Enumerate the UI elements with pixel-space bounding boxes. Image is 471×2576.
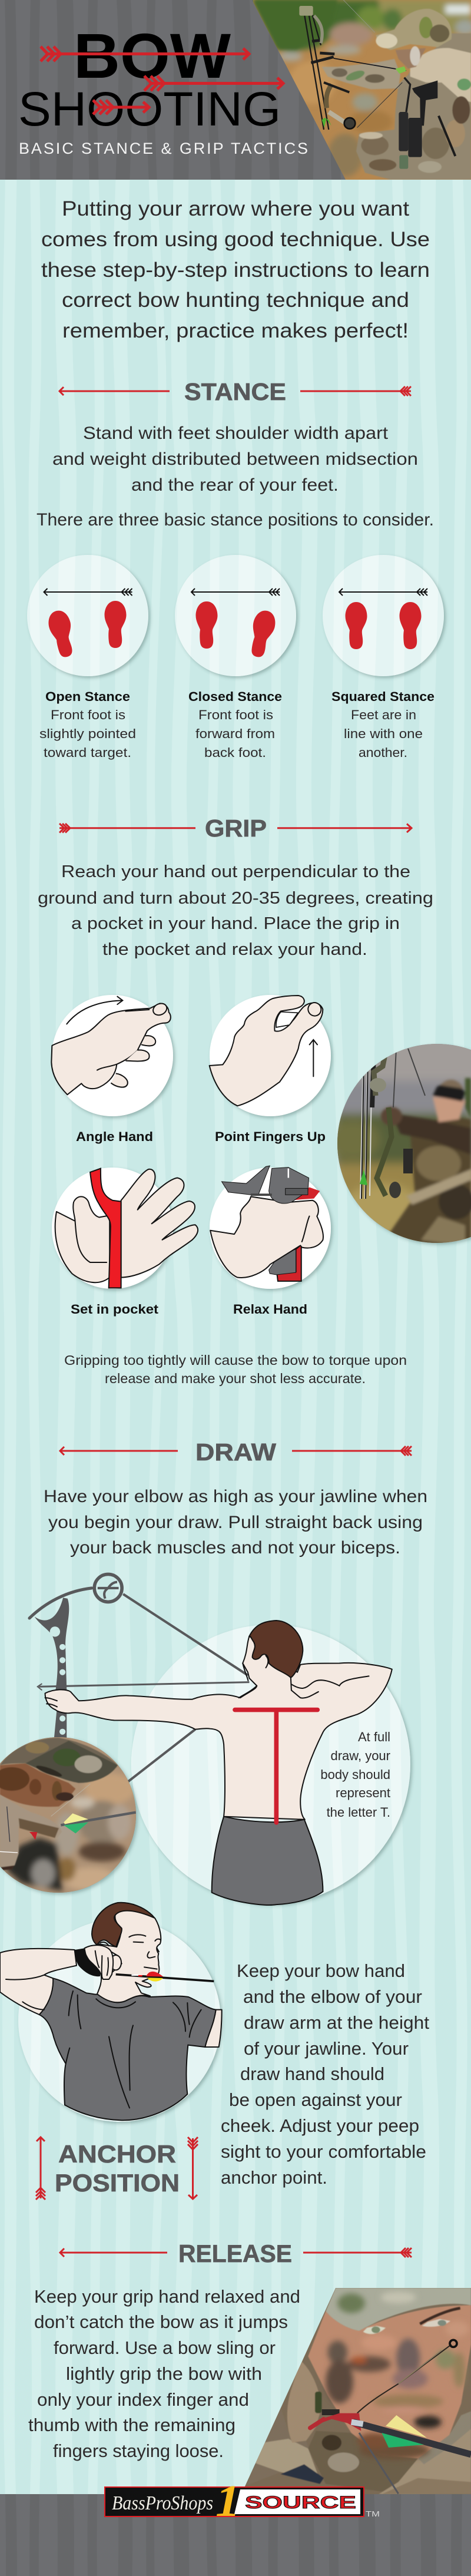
section: stance	[27, 378, 444, 760]
icon: open stance feet	[46, 601, 127, 659]
panel: closed stance: forward from	[195, 726, 275, 741]
subtitle: BASIC STANCE & GRIP TACTICS	[19, 140, 308, 157]
caption: full draw: the letter T.	[327, 1805, 390, 1820]
arrow: top title arrow	[41, 47, 249, 61]
icon: arrow with fletching	[116, 1972, 214, 1982]
panel: squared stance: Feet are in	[351, 707, 416, 722]
panel: anchor circle	[18, 1919, 221, 2122]
anchor description: draw arm at the height	[244, 2012, 429, 2033]
draw description: you begin your draw. Pull straight back using	[48, 1513, 423, 1532]
intro paragraph: these step-by-step instructions to learn	[41, 259, 430, 282]
heading: anchor position	[36, 2137, 198, 2200]
intro paragraph	[41, 197, 430, 342]
anchor description: anchor point.	[221, 2167, 327, 2188]
white source panel	[234, 2489, 360, 2514]
illustration: angle hand	[51, 995, 173, 1144]
heading: draw	[60, 1439, 412, 1466]
photo: close-up of hunter drawing arrow	[0, 1736, 140, 1895]
release description: thumb with the remaining	[28, 2415, 236, 2435]
header banner	[0, 0, 471, 180]
photo: hunter aiming bow in circle	[327, 1043, 471, 1249]
heading: release	[60, 2240, 412, 2267]
caption: full draw	[320, 1730, 390, 1820]
anchor description	[221, 1960, 429, 2188]
panel: squared stance: another.	[359, 745, 407, 760]
release description: only your index finger and	[37, 2389, 249, 2410]
illustration: archer at anchor point	[0, 1903, 222, 2120]
caption: full draw: At full	[358, 1730, 390, 1744]
section: anchor position	[0, 1903, 429, 2200]
stance description: There are three basic stance positions to consider.	[37, 510, 434, 530]
icon: wrist band	[75, 1948, 100, 1976]
draw description: your back muscles and not your biceps.	[70, 1538, 400, 1557]
release description: fingers staying loose.	[53, 2441, 224, 2461]
anchor description: cheek. Adjust your peep	[221, 2115, 419, 2136]
anchor description: Keep your bow hand	[237, 1960, 405, 1981]
photo: hunter face with camo paint	[241, 2286, 471, 2496]
panel: open stance	[27, 555, 148, 760]
panel: open stance: Open Stance	[45, 689, 130, 704]
anchor description: sight to your comfortable	[221, 2141, 426, 2162]
intro paragraph: Putting your arrow where you want	[62, 197, 409, 220]
stance description: and the rear of your feet.	[131, 475, 339, 495]
figure: grey t-shirt	[39, 1978, 216, 2120]
illustration: set in pocket	[52, 1168, 198, 1317]
title: BOW: BOW	[74, 20, 231, 91]
draw description	[44, 1487, 427, 1557]
illustration: archer at full draw forming a T	[29, 1574, 392, 1905]
stance description: Stand with feet shoulder width apart	[83, 424, 389, 443]
logo: Bass Pro Shops 1 Source: BassProShops	[112, 2492, 213, 2514]
figure: head and hair	[92, 1903, 161, 2002]
anchor description: and the elbow of your	[243, 1986, 422, 2007]
release description: lightly grip the bow with	[66, 2363, 262, 2384]
heading: release: RELEASE	[178, 2240, 292, 2267]
illustration: set in pocket: Set in pocket	[71, 1302, 159, 1317]
caption: full draw: body should	[320, 1767, 390, 1782]
heading: anchor position: POSITION	[55, 2169, 180, 2197]
illustration: point fingers up	[210, 995, 331, 1144]
grip description	[38, 862, 433, 959]
release description: Keep your grip hand relaxed and	[34, 2286, 300, 2307]
anchor description: be open against your	[229, 2089, 402, 2110]
caption: full draw: represent	[336, 1785, 390, 1800]
logo: Bass Pro Shops 1 Source: 1	[215, 2476, 240, 2526]
panel: open stance: Front foot is	[51, 707, 125, 722]
grip description: ground and turn about 20-35 degrees, creating	[38, 889, 433, 908]
icon: compound bow	[29, 1574, 249, 1782]
panel: closed stance: back foot.	[204, 745, 266, 760]
section: draw	[0, 1439, 427, 1905]
intro paragraph: correct bow hunting technique and	[62, 289, 409, 312]
panel: squared stance: line with one	[344, 726, 423, 741]
illustration: relax hand: Relax Hand	[233, 1302, 307, 1317]
heading: stance: STANCE	[184, 378, 286, 405]
illustration: relax hand	[210, 1166, 331, 1317]
draw description: Have your elbow as high as your jawline when	[44, 1487, 427, 1506]
logo: Bass Pro Shops 1 Source	[105, 2476, 380, 2526]
arrow: lower title arrow	[93, 100, 149, 114]
release description: forward. Use a bow sling or	[54, 2337, 276, 2358]
figure: shirtless archer back	[45, 1621, 392, 1905]
logo: Bass Pro Shops 1 Source: SOURCE	[245, 2493, 356, 2512]
stance description: and weight distributed between midsection	[52, 449, 418, 469]
anchor description: draw hand should	[240, 2064, 384, 2084]
section: grip	[38, 815, 471, 1386]
release description: don’t catch the bow as it jumps	[34, 2312, 288, 2332]
title: SHOOTING: SHOOTING	[18, 82, 281, 136]
intro paragraph: remember, practice makes perfect!	[62, 319, 409, 342]
illustration: point fingers up: Point Fingers Up	[215, 1129, 326, 1144]
stance description	[37, 424, 434, 530]
arrow: middle title arrow	[144, 76, 283, 91]
intro paragraph: comes from using good technique. Use	[41, 228, 430, 251]
icon: squared stance feet	[345, 602, 422, 649]
icon: closed stance feet	[195, 601, 278, 659]
heading: anchor position: ANCHOR	[58, 2140, 176, 2168]
section: release	[28, 2240, 471, 2496]
grip description: a pocket in your hand. Place the grip in	[71, 914, 400, 933]
heading: grip	[59, 815, 412, 842]
grip note: Gripping too tightly will cause the bow to torque upon	[64, 1353, 407, 1368]
release description	[28, 2286, 300, 2461]
grip note: release and make your shot less accurate.	[105, 1371, 366, 1386]
panel: squared stance	[323, 555, 444, 760]
heading: draw: DRAW	[195, 1439, 276, 1466]
illustration: angle hand: Angle Hand	[76, 1129, 153, 1144]
grey header panel	[0, 0, 471, 180]
footer band	[0, 2494, 471, 2576]
panel: squared stance: Squared Stance	[331, 689, 434, 704]
panel: open stance: toward target.	[44, 745, 131, 760]
panel: closed stance	[175, 555, 296, 760]
photo: hunter kneeling with bow	[253, 0, 471, 180]
anchor description: of your jawline. Your	[244, 2038, 409, 2059]
panel: closed stance: Front foot is	[198, 707, 273, 722]
grip description: Reach your hand out perpendicular to the	[61, 862, 410, 881]
panel: open stance: slightly pointed	[39, 726, 136, 741]
grip description: the pocket and relax your hand.	[102, 940, 367, 959]
heading: stance	[59, 378, 411, 405]
panel: full draw circle	[131, 1625, 410, 1904]
caption: full draw: draw, your	[331, 1748, 390, 1763]
logo: Bass Pro Shops 1 Source: TM	[366, 2509, 380, 2518]
panel: closed stance: Closed Stance	[188, 689, 282, 704]
heading: grip: GRIP	[205, 815, 267, 842]
grip note	[64, 1353, 407, 1386]
